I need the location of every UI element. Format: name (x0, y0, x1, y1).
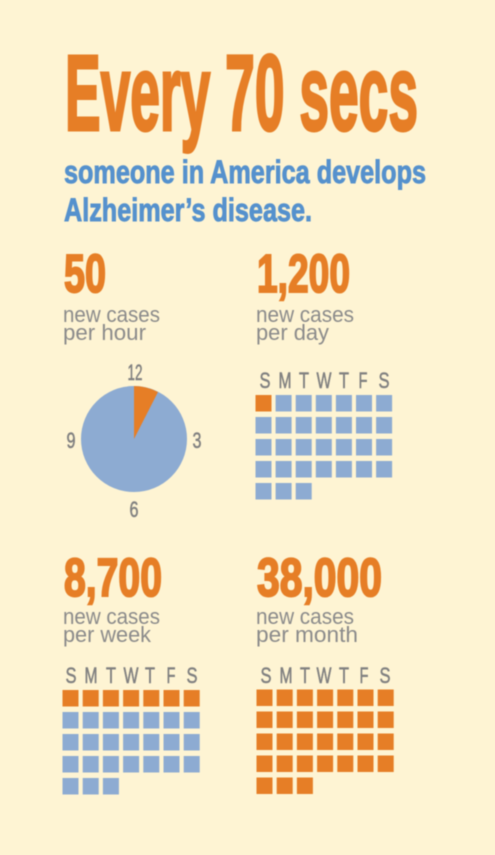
panel: per day (256, 244, 392, 500)
subtitle (64, 154, 426, 228)
calendar: per week: W (124, 663, 139, 688)
clock chart: 12 (128, 360, 142, 385)
calendar: per month: S (260, 663, 272, 688)
calendar: per day: M (278, 368, 292, 393)
calendar: per week: M (84, 663, 98, 688)
panel: per hour (63, 244, 202, 522)
stat: 38,000 per month: per month (256, 622, 358, 647)
stat: 8,700 per week: 8,700 (64, 548, 162, 608)
stat: 1,200 per day: new cases (256, 302, 354, 327)
stat: 1,200 per day (256, 244, 354, 345)
calendar: per day: W (316, 368, 332, 393)
calendar: per day: T (339, 368, 349, 393)
stat: 8,700 per week: new cases (63, 604, 160, 629)
stat: 38,000 per month (256, 548, 382, 647)
clock chart (66, 360, 202, 522)
calendar: per day (256, 368, 392, 500)
subtitle: Alzheimer’s disease. (64, 192, 312, 228)
stat: 50 per hour: new cases (63, 302, 160, 327)
panel: per month (256, 548, 394, 794)
stat: 50 per hour: per hour (63, 320, 146, 345)
stat: 38,000 per month: new cases (256, 604, 354, 629)
calendar: per month: W (316, 663, 332, 688)
stat: 1,200 per day: 1,200 (257, 244, 350, 304)
stat: 8,700 per week: per week (63, 622, 152, 647)
clock chart: 6 (130, 497, 138, 522)
calendar: per month: S (380, 663, 390, 688)
calendar: per week: S (186, 663, 198, 688)
stat: 8,700 per week (63, 548, 162, 647)
calendar: per day: S (378, 368, 390, 393)
calendar: per month (256, 663, 394, 794)
calendar: per week: S (66, 663, 76, 688)
calendar: per day: F (358, 368, 368, 393)
calendar: per day: T (299, 368, 309, 393)
stat: 1,200 per day: per day (256, 320, 329, 345)
stat: 50 per hour (63, 244, 160, 345)
calendar: per week (62, 663, 200, 794)
calendar: per week: T (106, 663, 116, 688)
calendar: per week: T (145, 663, 155, 688)
calendar: per month: T (300, 663, 310, 688)
calendar: per day: S (260, 368, 270, 393)
panel: per week (62, 548, 200, 794)
stat: 50 per hour: 50 (64, 244, 106, 304)
calendar: per month: T (339, 663, 349, 688)
calendar: per month: M (280, 663, 292, 688)
calendar: per month: F (360, 663, 368, 688)
clock chart: 9 (66, 428, 76, 453)
stat: 38,000 per month: 38,000 (257, 548, 382, 608)
clock chart: 3 (192, 428, 202, 453)
calendar: per week: F (166, 663, 176, 688)
